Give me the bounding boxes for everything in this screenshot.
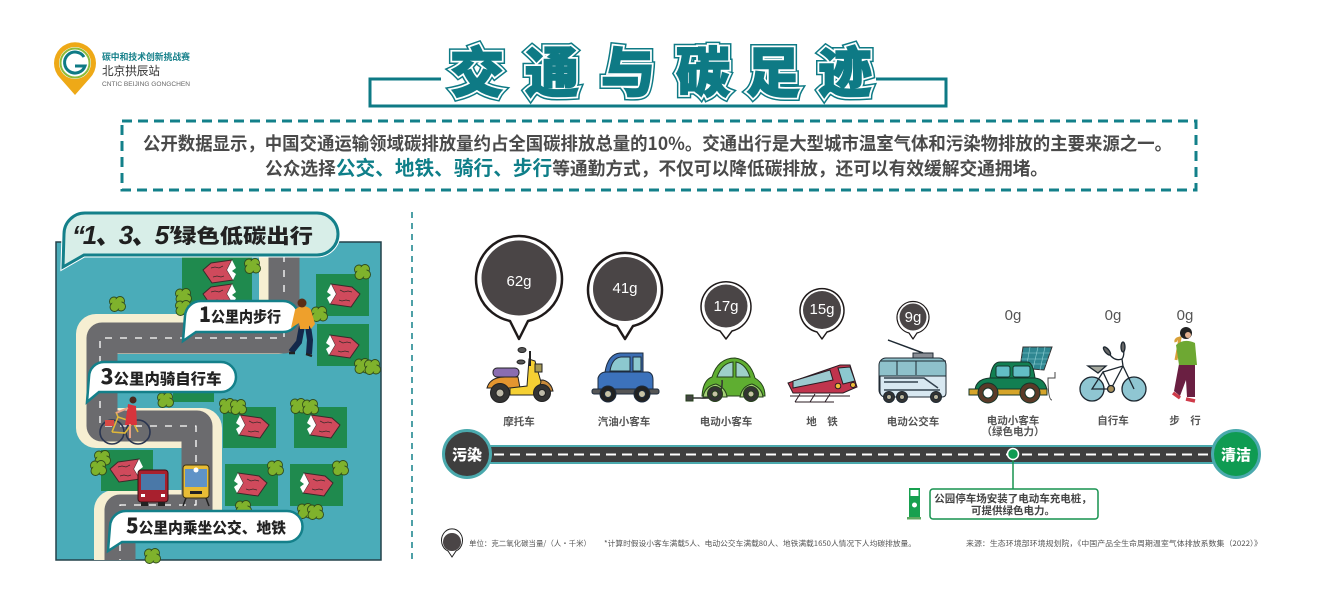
labels: vehicle names [503, 413, 1201, 439]
icon: walking man [289, 298, 315, 356]
legend and source footnote [442, 529, 1262, 557]
marker: polluting end [444, 430, 490, 478]
callout: charging pile note [907, 448, 1098, 520]
pin: motorcycle 62g: 62g [506, 273, 532, 290]
title: 交通与碳足迹 [370, 29, 946, 108]
title: 交通与碳足迹: 迹 [818, 29, 872, 108]
labels: vehicle names: 地 铁 [806, 414, 838, 429]
icon: pedestrian [1173, 327, 1197, 401]
icon: red bus [138, 470, 168, 506]
legend and source footnote: 单位：克二氧化碳当量/（人·千米） [469, 538, 591, 549]
title: 交通与碳足迹: 通 [525, 29, 579, 108]
map: trees [90, 258, 380, 564]
labels: vehicle names: 汽油小客车 [598, 414, 650, 429]
icon: solar electric car [969, 347, 1055, 403]
value: bicycle 0g: 0g [1105, 307, 1121, 324]
labels: vehicle names: 电动小客车 [987, 413, 1039, 428]
pin: electric car 17g: 17g [713, 298, 739, 315]
value: walking 0g: 0g [1177, 307, 1193, 324]
title: 交通与碳足迹: 与 [601, 29, 655, 108]
callout: charging pile note: 公园停车场安装了电动车充电桩， [934, 491, 1092, 506]
heading: 1-3-5 green travel: 绿色低碳出行 [173, 220, 313, 249]
icon: legend pin [442, 529, 463, 557]
panel: intro text box: 公众选择公交、地铁、骑行、步行等通勤方式，不仅可以降低碳排放，还可以有效缓解交通拥堵。 [265, 152, 1048, 181]
logo: Beijing Gongchen station [54, 42, 190, 95]
icon: location pin [54, 42, 96, 95]
callout: 5km bus and subway: 5公里内乘坐公交、地铁 [126, 510, 286, 540]
pin: motorcycle 62g [476, 236, 562, 339]
title: 交通与碳足迹: 通 [525, 29, 579, 108]
panel: emissions comparison [442, 236, 1262, 557]
labels: vehicle names: 电动小客车 [700, 414, 752, 429]
heading: 1-3-5 green travel [63, 213, 338, 267]
panel: intro text box [122, 121, 1196, 190]
icon: charging pile [907, 488, 921, 520]
callout: 5km bus and subway [108, 510, 302, 551]
title: 交通与碳足迹: 与 [601, 29, 655, 108]
title: 交通与碳足迹: 迹 [818, 29, 872, 108]
icon: motorcycle [487, 348, 553, 402]
title: 交通与碳足迹: 碳 [676, 29, 730, 108]
callout: 3km bicycle: 3公里内骑自行车 [100, 361, 222, 391]
pin: electric bus 9g: 9g [905, 309, 921, 326]
callout: 1km walk [183, 299, 298, 341]
logo text: CNTIC BEIJING GONGCHEN [102, 81, 190, 88]
pin: subway 15g [800, 289, 844, 339]
title: 交通与碳足迹: 交 [450, 29, 504, 108]
labels: vehicle names: 电动公交车 [887, 414, 939, 429]
title: 交通与碳足迹: 交 [450, 29, 504, 108]
icon: woman on bicycle [100, 396, 150, 444]
logo text [102, 50, 190, 88]
callout: 3km bicycle [87, 361, 236, 402]
legend and source footnote: 来源：生态环境部环境规划院，《中国产品全生命周期温室气体排放系数集（2022）》 [966, 538, 1262, 549]
pin: petrol car 41g: 41g [612, 280, 638, 297]
labels: vehicle names: （绿色电力） [982, 424, 1044, 439]
pin: subway 15g: 15g [809, 301, 835, 318]
icon: bicycle [1080, 342, 1146, 401]
pin: electric car 17g [701, 282, 751, 339]
map: roads [96, 250, 284, 565]
title: 交通与碳足迹: 足 [746, 29, 800, 108]
icon: petrol car [592, 353, 659, 402]
panel: intro text box: 公开数据显示，中国交通运输领域碳排放量约占全国碳排放总量的10%。交通出行是大型城市温室气体和污染物排放的主要来源之一。 [143, 130, 1172, 156]
title: 交通与碳足迹: 与 [601, 29, 655, 108]
heading: 1-3-5 green travel: “1、3、5” [72, 220, 180, 250]
title: 交通与碳足迹: 交 [450, 29, 504, 108]
marker: clean end: 清洁 [1221, 444, 1251, 465]
callout: 1km walk: 1公里内步行 [199, 299, 281, 329]
labels: vehicle names: 步 行 [1169, 413, 1201, 428]
icon: electric car with plug [686, 358, 765, 402]
pin: petrol car 41g [588, 253, 662, 339]
labels: vehicle names: 自行车 [1097, 413, 1129, 428]
title: 交通与碳足迹: 碳 [676, 29, 730, 108]
title: 交通与碳足迹: 通 [525, 29, 579, 108]
labels: vehicle names: 摩托车 [503, 414, 535, 429]
icon: subway train [788, 365, 857, 402]
value: green electric car 0g: 0g [1005, 307, 1021, 324]
callout: charging pile note: 可提供绿色电力。 [971, 503, 1055, 518]
map: houses [110, 260, 360, 496]
title: 交通与碳足迹: 足 [746, 29, 800, 108]
title: 交通与碳足迹: 足 [746, 29, 800, 108]
icon: electric trolley bus [879, 340, 946, 402]
marker: polluting end: 污染 [452, 444, 482, 465]
pin: electric bus 9g [897, 302, 929, 339]
logo text: 北京拱辰站 [102, 62, 160, 79]
map: residential blocks [101, 257, 369, 506]
title: 交通与碳足迹: 碳 [676, 29, 730, 108]
legend and source footnote: *计算时假设小客车满载5人、电动公交车满载80人、地铁满载1650人情况下人均碳排放量。 [604, 538, 916, 549]
scale: pollution-to-clean road [444, 430, 1260, 478]
panel: 1-3-5 map [56, 213, 381, 565]
title: 交通与碳足迹: 迹 [818, 29, 872, 108]
icon: yellow tram [183, 465, 209, 506]
marker: clean end [1212, 430, 1260, 478]
logo text: 碳中和技术创新挑战赛 [102, 50, 190, 63]
